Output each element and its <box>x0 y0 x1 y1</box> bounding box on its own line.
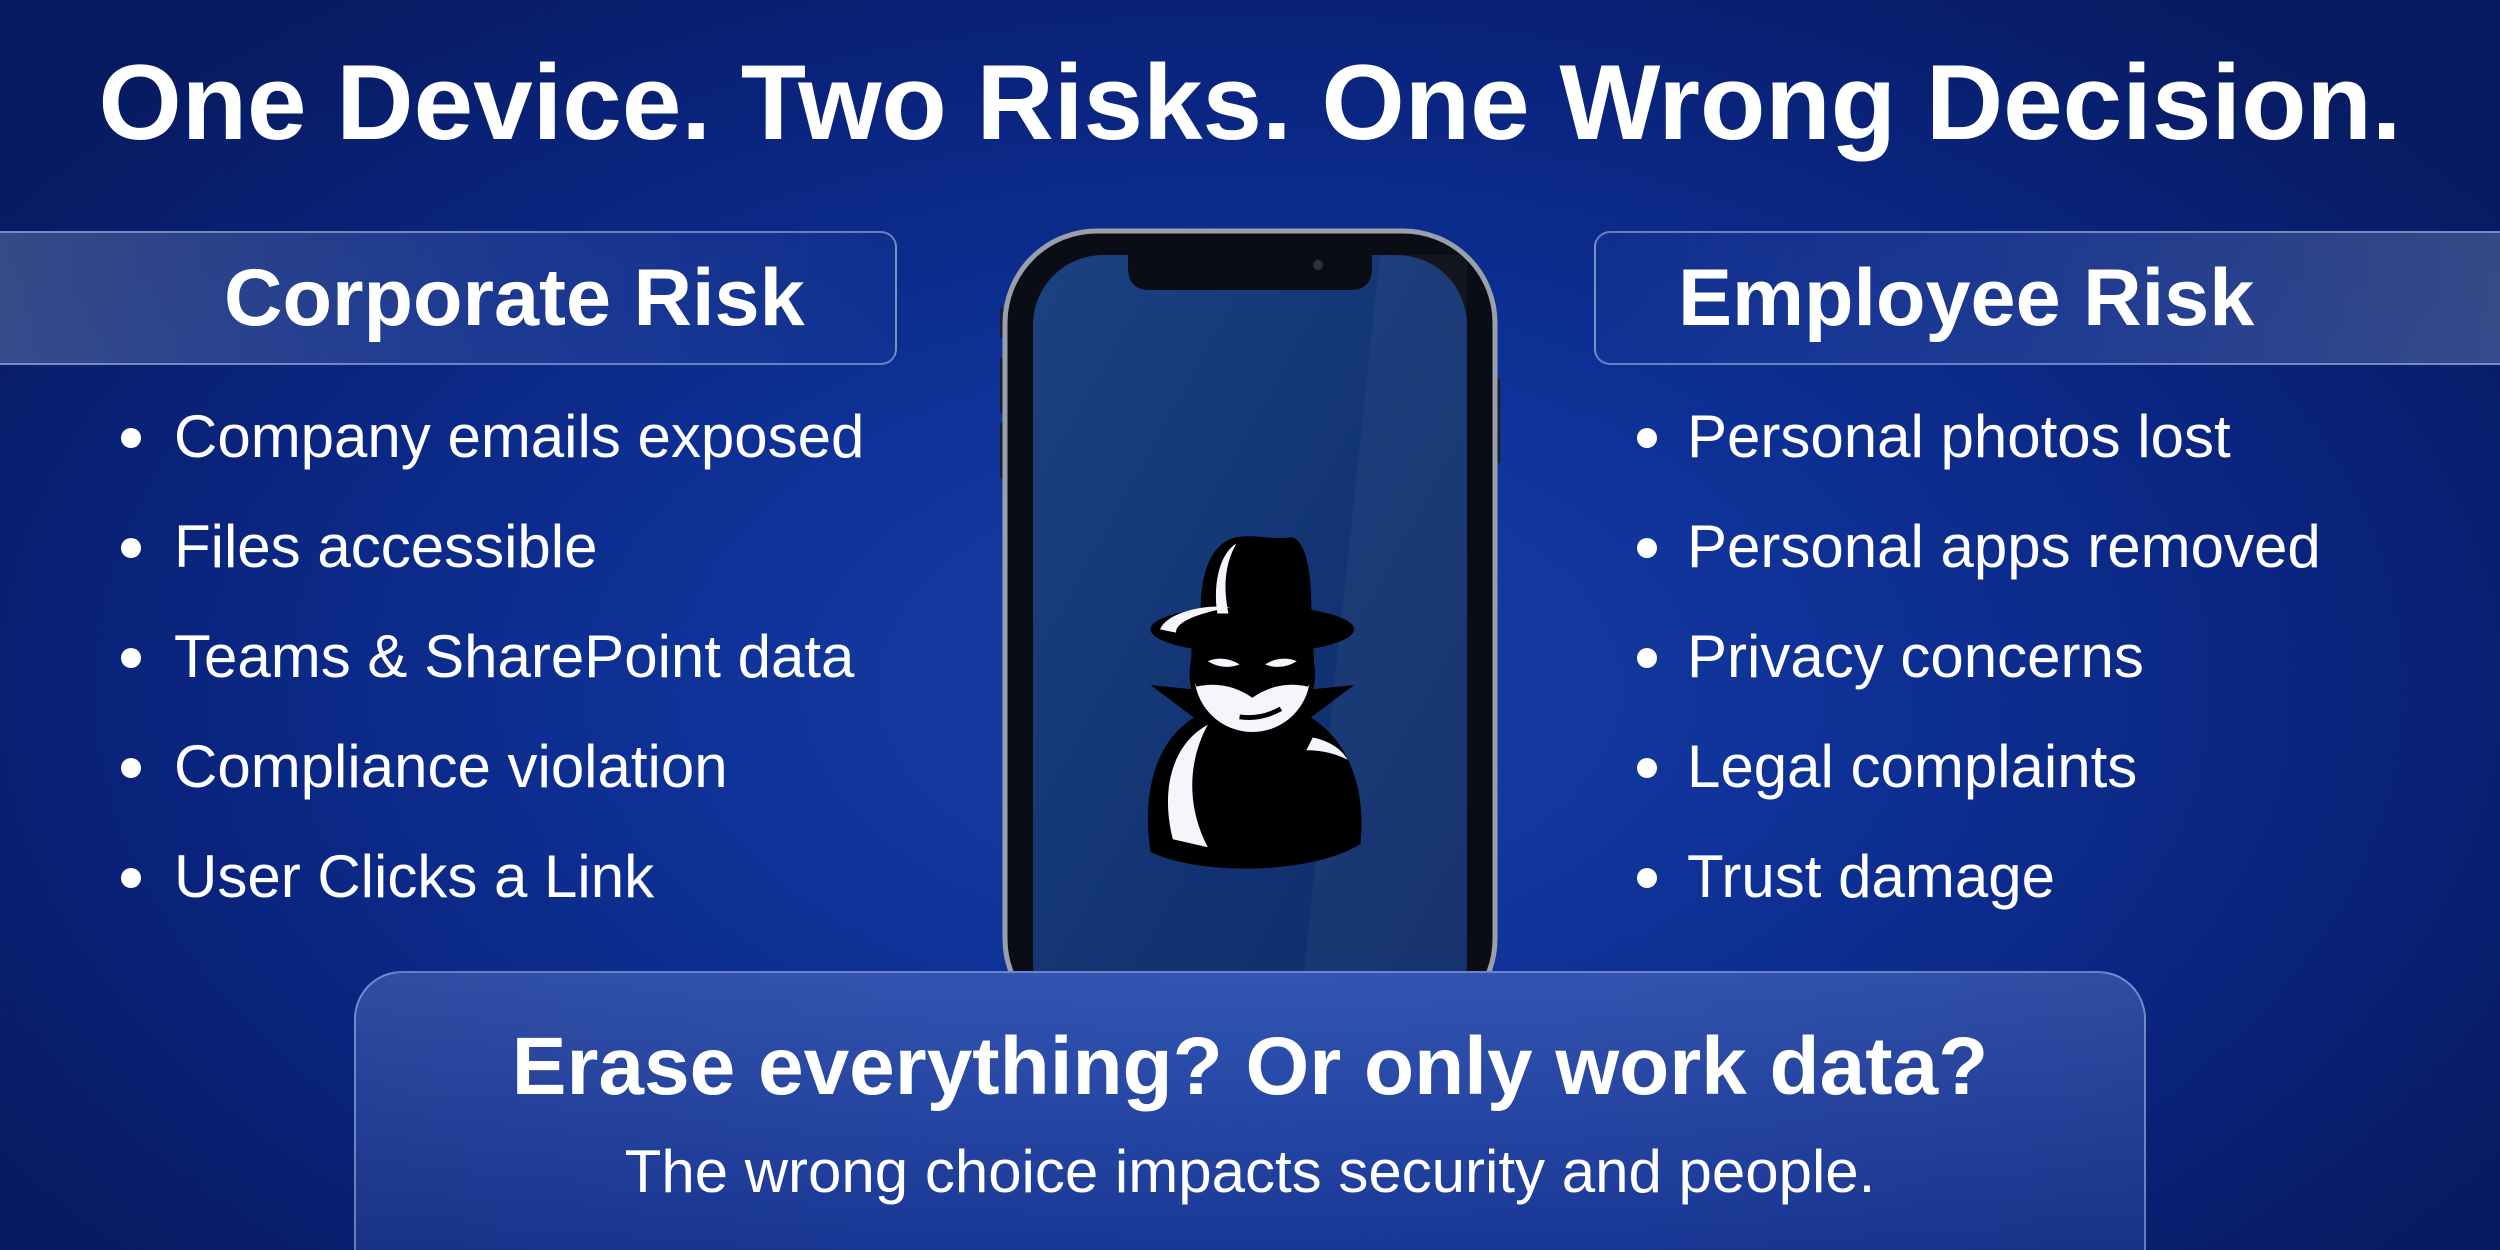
list: employee risks: Privacy concerns <box>1687 623 2144 690</box>
title: One Device. Two Risks. One Wrong Decision. <box>98 42 2402 162</box>
list: employee risks <box>1637 403 2321 910</box>
list: corporate risks: Company emails exposed <box>174 403 864 470</box>
panel header: corporate risk: Corporate Risk <box>224 253 805 343</box>
panel header: corporate risk <box>0 231 897 365</box>
list: corporate risks: Files accessible <box>174 513 598 580</box>
callout heading: Erase everything? Or only work data? <box>512 1021 1988 1112</box>
callout subtext: The wrong choice impacts security and people. <box>625 1138 1875 1205</box>
list: employee risks: Personal apps removed <box>1687 513 2321 580</box>
icon: spy <box>1148 536 1362 869</box>
list: employee risks: Legal complaints <box>1687 733 2137 800</box>
list: corporate risks: Compliance violation <box>174 733 728 800</box>
list: corporate risks: User Clicks a Link <box>174 843 654 910</box>
list: employee risks: Trust damage <box>1687 843 2055 910</box>
bottom callout box <box>354 971 2146 1250</box>
list: corporate risks: Teams & SharePoint data <box>174 623 854 690</box>
phone <box>1000 228 1500 971</box>
panel header: employee risk: Employee Risk <box>1678 253 2254 343</box>
list: employee risks: Personal photos lost <box>1687 403 2231 470</box>
panel header: employee risk <box>1594 231 2500 365</box>
list: corporate risks <box>121 403 864 910</box>
